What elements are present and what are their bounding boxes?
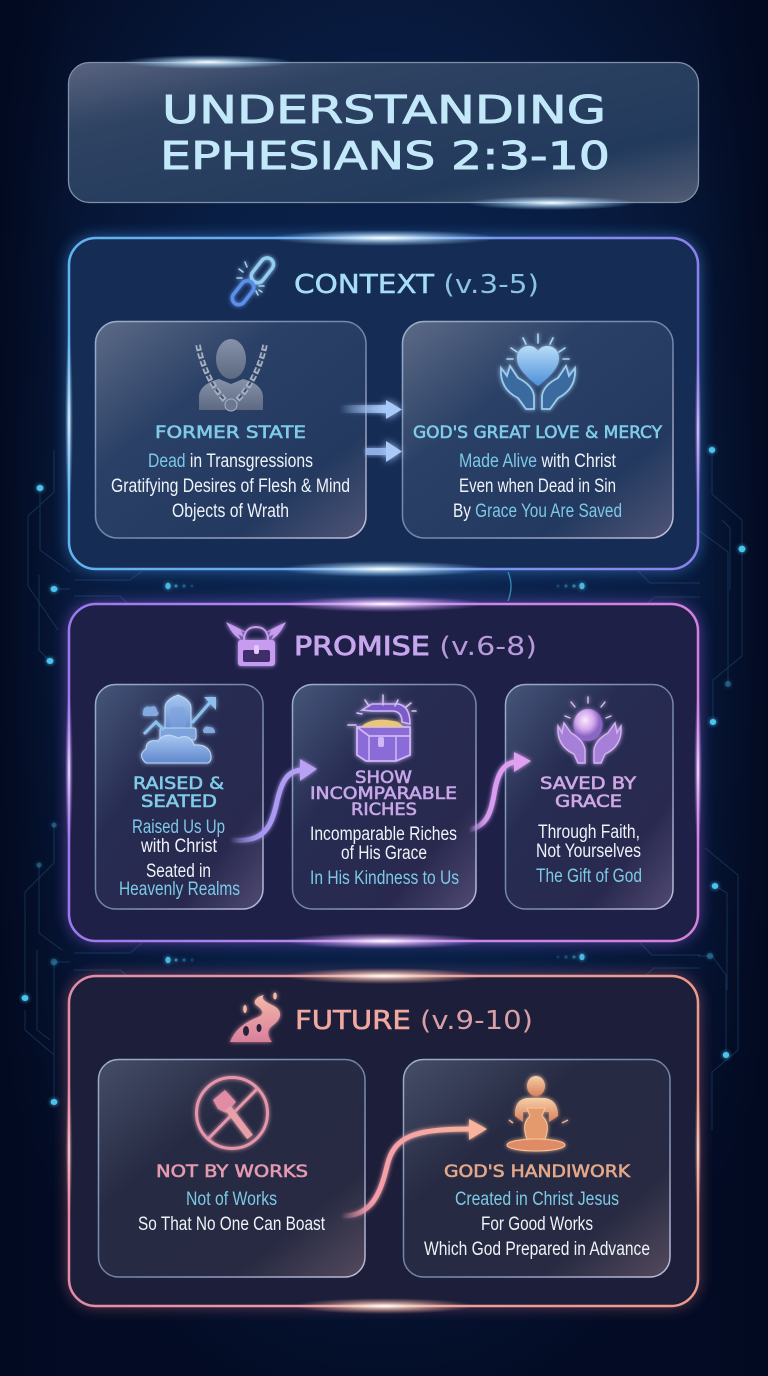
love and mercy text: By Grace You Are Saved xyxy=(453,501,622,522)
title text: EPHESIANS 2:3-10 xyxy=(160,134,610,178)
card: god's handiwork xyxy=(404,1060,670,1277)
raised and seated text xyxy=(119,817,240,900)
future heading: FUTURE (v.9-10) xyxy=(295,1006,533,1036)
former state text: Dead in Transgressions xyxy=(148,451,313,472)
title text: UNDERSTANDING xyxy=(162,88,606,132)
riches heading: SHOW xyxy=(355,768,412,787)
former state text xyxy=(111,451,350,522)
handiwork text: Created in Christ Jesus xyxy=(455,1189,619,1210)
icon: throne on clouds xyxy=(142,695,216,763)
raised and seated heading xyxy=(133,774,224,811)
love and mercy heading: GOD'S GREAT LOVE & MERCY xyxy=(413,423,663,442)
riches heading: INCOMPARABLE xyxy=(310,784,457,803)
raised and seated text: Raised Us Up xyxy=(132,817,225,838)
icon: chained person xyxy=(198,339,265,411)
promise heading: PROMISE (v.6-8) xyxy=(294,632,537,662)
former state heading: FORMER STATE xyxy=(155,423,306,442)
arrow: upper context xyxy=(340,400,402,419)
panel: future xyxy=(66,968,702,1314)
riches text: Incomparable Riches xyxy=(310,824,457,845)
icon: orb in hands xyxy=(558,697,621,763)
raised and seated text: Heavenly Realms xyxy=(119,879,240,900)
not by works heading: NOT BY WORKS xyxy=(156,1162,308,1181)
circuit decoration: left xyxy=(25,450,700,1102)
love and mercy text: Even when Dead in Sin xyxy=(459,476,616,497)
card: show incomparable riches xyxy=(292,684,476,909)
icon: treasure chest xyxy=(348,695,416,761)
icon: crossed-out hammer xyxy=(196,1078,268,1148)
riches heading: RICHES xyxy=(351,800,417,819)
riches heading xyxy=(310,768,457,819)
icon: potter at wheel xyxy=(507,1076,568,1151)
not by works text xyxy=(138,1189,326,1235)
former state text: Objects of Wrath xyxy=(172,501,289,522)
title text xyxy=(160,88,610,178)
riches text: of His Grace xyxy=(341,843,427,864)
icon: winding road with footprints xyxy=(230,992,280,1042)
panel: promise xyxy=(65,596,702,949)
context heading: CONTEXT (v.3-5) xyxy=(294,270,539,300)
handiwork heading: GOD'S HANDIWORK xyxy=(444,1162,631,1181)
raised and seated text: Seated in xyxy=(146,861,211,882)
icon: winged chest xyxy=(226,622,286,666)
raised and seated heading: RAISED & xyxy=(133,774,224,793)
icon: broken chain link xyxy=(230,255,276,307)
saved by grace heading xyxy=(540,774,637,811)
riches text xyxy=(310,824,459,889)
card: raised and seated xyxy=(96,684,263,909)
raised and seated text: with Christ xyxy=(140,836,218,857)
riches text: In His Kindness to Us xyxy=(310,868,459,889)
circuit decoration: right xyxy=(698,450,742,1130)
icon: heart in hands xyxy=(501,334,575,409)
card: former state xyxy=(96,322,366,538)
love and mercy text xyxy=(453,451,622,522)
panel: context xyxy=(65,230,702,577)
not by works text: So That No One Can Boast xyxy=(138,1214,326,1235)
not by works text: Not of Works xyxy=(186,1189,277,1210)
saved by grace text: Through Faith, xyxy=(538,822,640,843)
card: not by works xyxy=(98,1060,365,1277)
former state text: Gratifying Desires of Flesh & Mind xyxy=(111,476,350,497)
arrow: works to handiwork xyxy=(341,1119,487,1216)
title panel xyxy=(68,55,698,210)
saved by grace heading: GRACE xyxy=(555,792,622,811)
arrow: riches to saved xyxy=(469,752,531,830)
arrow: lower context xyxy=(366,441,402,462)
love and mercy text: Made Alive with Christ xyxy=(459,451,617,472)
glowing circuit nodes xyxy=(22,447,745,1105)
card: god's great love and mercy xyxy=(402,322,673,538)
card: saved by grace xyxy=(506,684,673,909)
handiwork text: Which God Prepared in Advance xyxy=(424,1239,650,1260)
raised and seated heading: SEATED xyxy=(141,792,217,811)
handiwork text xyxy=(424,1189,650,1260)
saved by grace text: Not Yourselves xyxy=(536,841,641,862)
arrow: raised to riches xyxy=(230,759,317,840)
saved by grace text: The Gift of God xyxy=(536,866,642,887)
handiwork text: For Good Works xyxy=(481,1214,593,1235)
saved by grace text xyxy=(536,822,642,887)
saved by grace heading: SAVED BY xyxy=(540,774,637,793)
